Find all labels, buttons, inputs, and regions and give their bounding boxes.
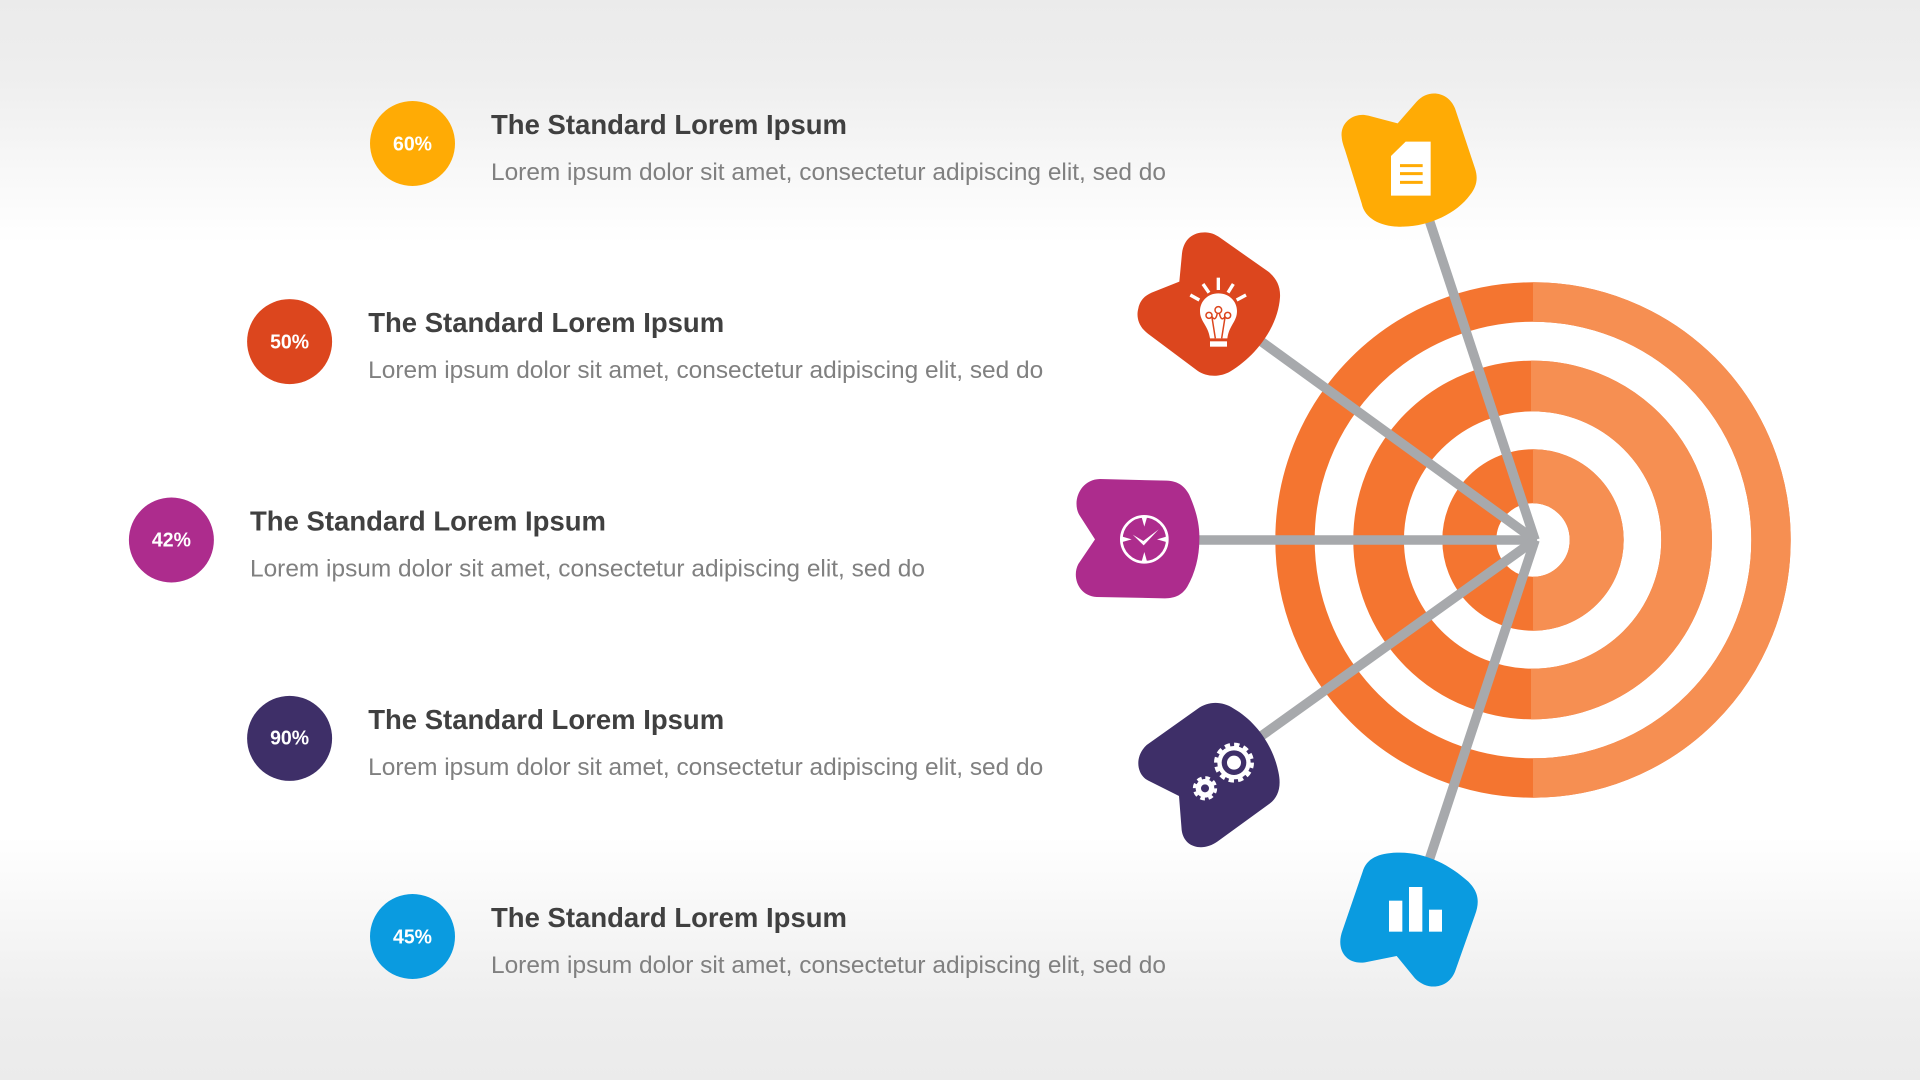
icon badge: light bulb xyxy=(1138,232,1280,376)
item 50% xyxy=(247,299,1043,384)
item 42%: Lorem ipsum dolor sit amet, consectetur adipiscing elit, sed do xyxy=(250,556,925,582)
item 45%: Lorem ipsum dolor sit amet, consectetur adipiscing elit, sed do xyxy=(491,952,1166,979)
item 60%: Lorem ipsum dolor sit amet, consectetur adipiscing elit, sed do xyxy=(491,159,1166,186)
icon badge: bar chart xyxy=(1340,853,1478,987)
icon badge: clock xyxy=(1076,479,1199,598)
item 42% xyxy=(129,498,925,582)
item 90% xyxy=(247,696,1043,781)
connector spokes xyxy=(1190,215,1537,865)
item 60%: The Standard Lorem Ipsum xyxy=(491,109,847,140)
item 42%: The Standard Lorem Ipsum xyxy=(250,506,606,536)
item 45% xyxy=(370,894,1166,979)
icon badge: document xyxy=(1342,93,1477,227)
item 50%: The Standard Lorem Ipsum xyxy=(368,307,724,338)
item 45%: 45% xyxy=(393,926,432,948)
target: concentric rings xyxy=(1295,302,1771,778)
item 90%: The Standard Lorem Ipsum xyxy=(368,704,724,735)
item 60%: 60% xyxy=(393,134,432,156)
item 42%: 42% xyxy=(152,530,191,552)
item 90%: Lorem ipsum dolor sit amet, consectetur adipiscing elit, sed do xyxy=(368,754,1043,781)
item 50%: 50% xyxy=(270,332,309,354)
item 60% xyxy=(370,101,1166,186)
item 90%: 90% xyxy=(270,727,309,749)
item 45%: The Standard Lorem Ipsum xyxy=(491,902,847,933)
item 50%: Lorem ipsum dolor sit amet, consectetur adipiscing elit, sed do xyxy=(368,357,1043,384)
icon badge: gears xyxy=(1138,703,1280,847)
